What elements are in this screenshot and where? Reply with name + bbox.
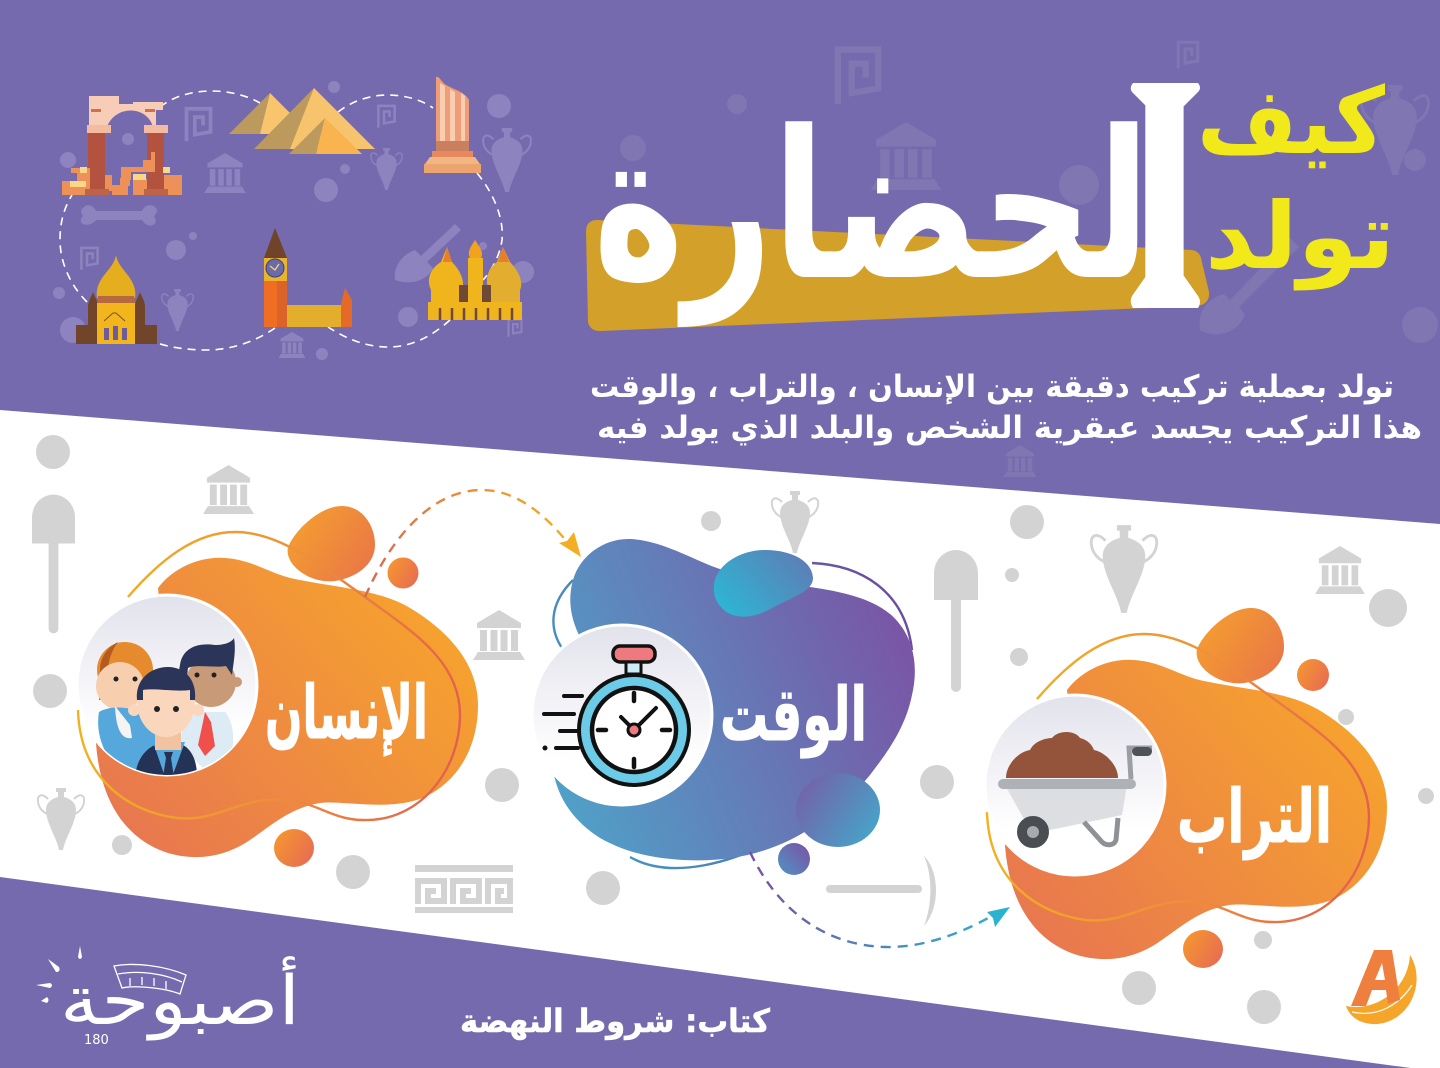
disc: soil xyxy=(985,695,1165,875)
blob: time xyxy=(553,539,915,860)
icon: clock tower and parliament xyxy=(264,228,352,327)
outline: time xyxy=(553,563,912,868)
logo: morning brand xyxy=(36,946,300,1048)
disc: time xyxy=(532,625,712,805)
title: civilization: ا xyxy=(1127,33,1202,374)
intro text line 2: هذا التركيب يجسد عبقرية الشخص والبلد الذي يولد فيه xyxy=(597,410,1422,446)
icon: pyramids xyxy=(229,88,375,154)
panel: soil xyxy=(985,608,1387,968)
icon: people xyxy=(96,638,242,777)
intro text line 1: تولد بعملية تركيب دقيقة بين الإنسان ، والتراب ، والوقت xyxy=(590,369,1394,405)
blob: human xyxy=(96,558,478,857)
label: soil: التراب xyxy=(1177,774,1332,860)
arrow: human to time xyxy=(365,490,581,597)
logo: publisher mark xyxy=(1346,950,1417,1024)
disc: human xyxy=(77,595,257,775)
label: time: الوقت xyxy=(720,672,867,759)
panel: time xyxy=(532,539,915,875)
label: human: الإنسان xyxy=(265,670,428,757)
blob: soil xyxy=(1005,660,1387,959)
icon: wheelbarrow xyxy=(998,732,1152,845)
white diagonal band xyxy=(0,410,1440,1068)
blob: small dot xyxy=(388,558,418,588)
blob: top accent xyxy=(288,506,375,581)
icon: gold title banner xyxy=(586,220,1209,331)
title flare: alif serifs xyxy=(1131,83,1200,308)
blob: teal accent xyxy=(714,550,813,617)
title: how: كيف xyxy=(1197,68,1385,175)
decorative watermark icons: right purple area xyxy=(620,42,1438,477)
illustration: landmarks loop xyxy=(60,77,522,350)
decorative watermark icons: white band xyxy=(32,435,1434,1024)
logo: morning brand: أصبوحة xyxy=(60,956,300,1041)
icon: ruined arch xyxy=(62,96,182,195)
icon: broken column xyxy=(424,77,481,173)
icon: stopwatch xyxy=(542,646,689,785)
arrow: time to soil xyxy=(750,852,1010,947)
icon: domed basilica xyxy=(76,255,157,344)
blob: small dot xyxy=(778,843,810,875)
panel: human xyxy=(77,506,478,867)
blob: small dot xyxy=(1297,659,1329,691)
dashed loop xyxy=(60,91,502,350)
blob: top accent xyxy=(1197,608,1284,683)
title: civilization: لحضارة xyxy=(593,87,1150,327)
blob: bottom dot xyxy=(274,829,314,867)
blob: lower accent xyxy=(796,773,880,847)
logo: morning brand: 180 xyxy=(84,1033,109,1048)
icon: onion dome palace xyxy=(428,240,522,320)
outline: soil xyxy=(987,634,1369,922)
title: is born: تولد xyxy=(1205,183,1395,291)
source line: كتاب: شروط النهضة xyxy=(460,1002,770,1040)
decorative watermark icons: upper purple area xyxy=(53,81,534,360)
blob: bottom dot xyxy=(1183,930,1223,968)
outline: human xyxy=(78,532,460,820)
